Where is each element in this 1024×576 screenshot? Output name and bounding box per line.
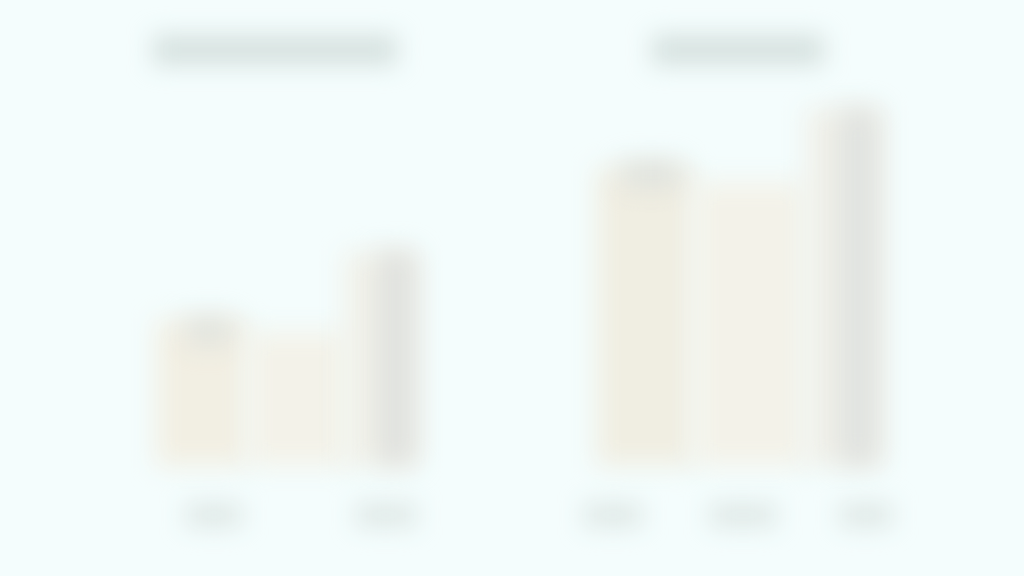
- left bar chart: [149, 239, 429, 478]
- left chart bar 1 top shade: [186, 318, 232, 344]
- right chart bar 2: [694, 182, 806, 466]
- right chart bar 3: [806, 108, 884, 466]
- right chart bar 3 shade: [840, 110, 876, 464]
- right chart label 3: [840, 503, 892, 527]
- left chart label 1: [186, 503, 242, 527]
- left chart bar 3: [344, 252, 418, 466]
- right chart bar 1 top shade: [622, 162, 680, 188]
- left chart title: [153, 35, 397, 65]
- right bar chart: [589, 97, 892, 477]
- left chart bar 1: [156, 320, 248, 466]
- right chart bar 1: [596, 168, 694, 466]
- left chart bar 3 shade: [378, 252, 414, 464]
- right chart label 2: [710, 503, 776, 527]
- left chart label 2: [356, 503, 416, 527]
- right chart title: [652, 35, 824, 65]
- right chart label 1: [584, 503, 642, 527]
- left chart bar 2: [248, 332, 348, 466]
